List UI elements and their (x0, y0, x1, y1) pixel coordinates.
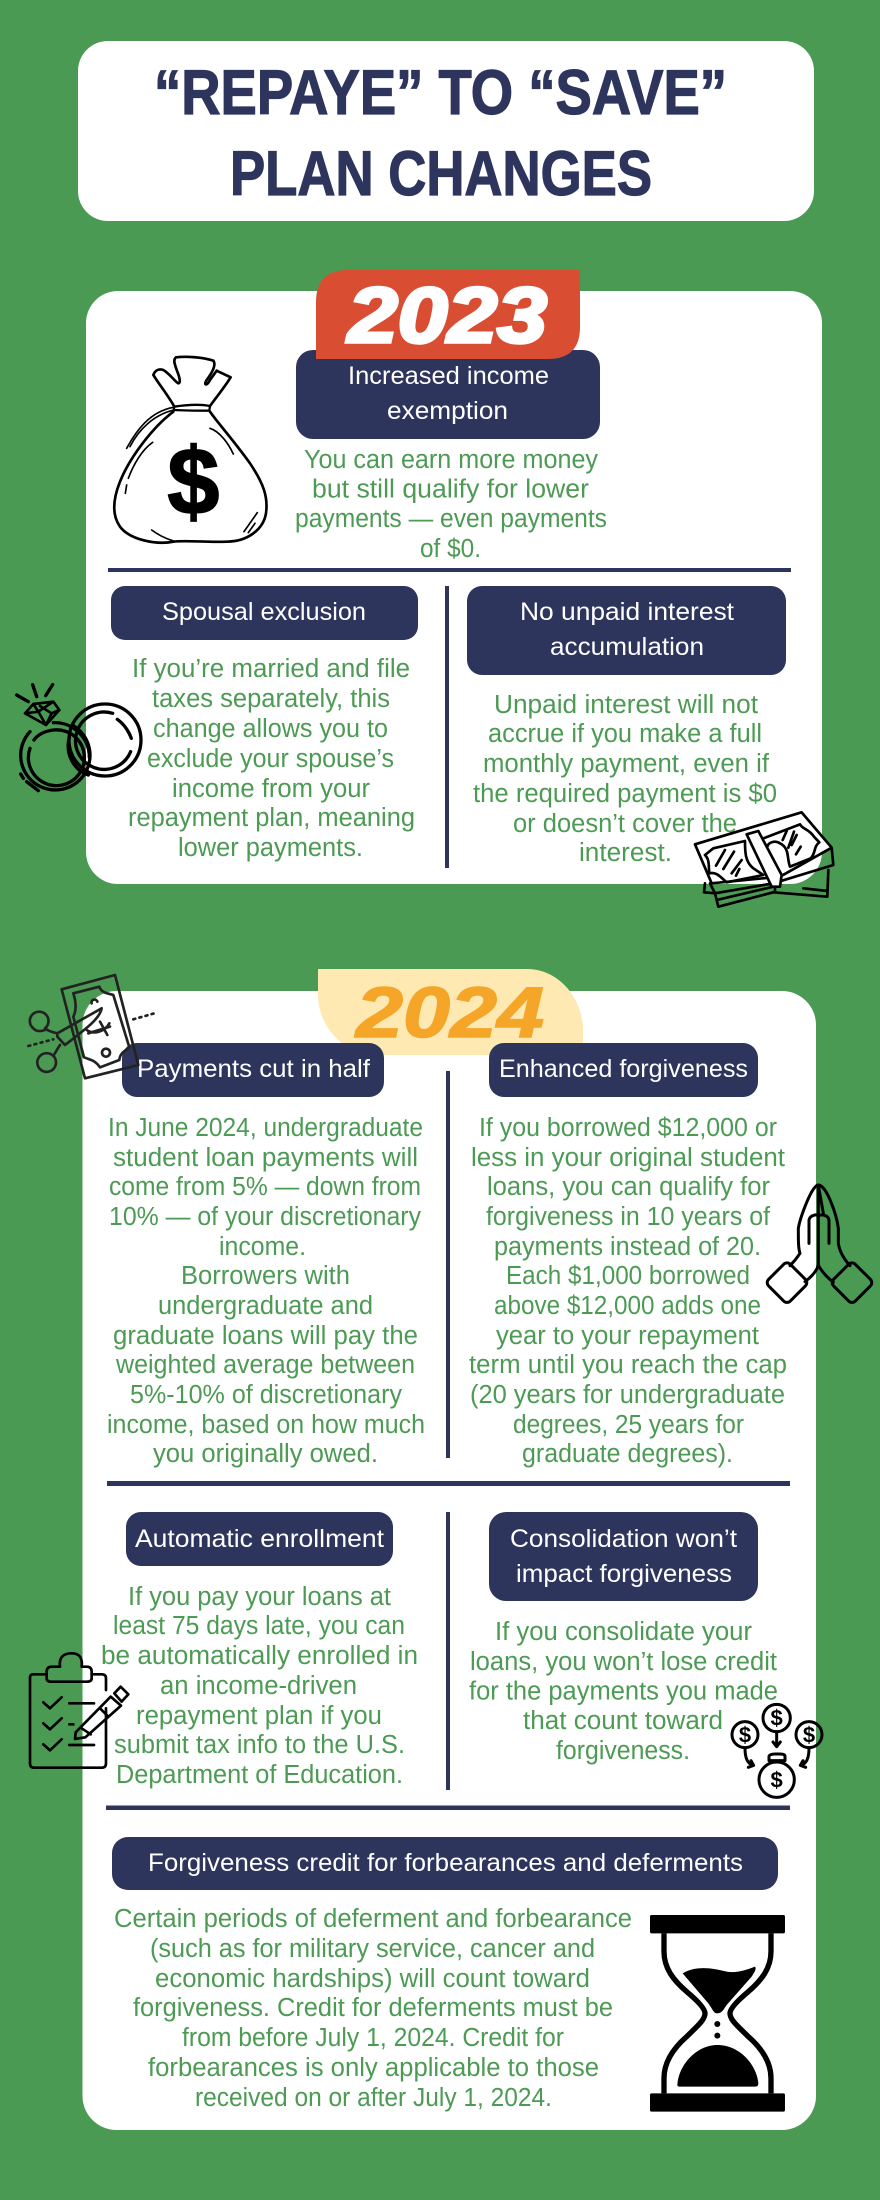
text: payments cut in half: graduate loans will pay the (113, 1322, 418, 1350)
text: no unpaid interest accumulation: Unpaid interest will not (494, 691, 758, 719)
heading pill: payments cut in half (122, 1043, 384, 1097)
icon: coins flowing into a money bag: $ (739, 1722, 751, 1747)
icon: money bag: $ (167, 429, 219, 535)
text: payments cut in half: undergraduate and (158, 1292, 373, 1320)
text: no unpaid interest accumulation: the required payment is $0 (473, 780, 777, 808)
text: payments cut in half: In June 2024, undergraduate (108, 1114, 423, 1142)
text: automatic enrollment: repayment plan if you (136, 1702, 382, 1730)
heading pill: increased income exemption: Increased income (348, 362, 549, 390)
text: automatic enrollment: an income-driven (160, 1672, 357, 1700)
icon: stack of cash (695, 812, 833, 907)
icon: wedding rings (17, 685, 141, 791)
text: consolidation won't impact forgiveness: that count toward (523, 1707, 723, 1735)
heading pill: spousal exclusion (111, 586, 418, 640)
year tab: 2023 (316, 270, 580, 359)
text: forgiveness credit: from before July 1, 2024. Credit for (182, 2024, 564, 2052)
text: spousal exclusion: taxes separately, this (152, 685, 390, 713)
text: payments cut in half: Borrowers with (181, 1262, 350, 1290)
heading pill: consolidation won't impact forgiveness: Consolidation won’t (510, 1525, 737, 1553)
year tab: 2024 (318, 969, 583, 1055)
icon: coins flowing into a money bag: $ (771, 1706, 783, 1731)
text: enhanced forgiveness: (20 years for undergraduate (470, 1381, 785, 1409)
text: no unpaid interest accumulation: monthly payment, even if (483, 750, 770, 778)
text: enhanced forgiveness: above $12,000 adds one (494, 1292, 761, 1320)
title: PLAN CHANGES (230, 139, 652, 209)
heading pill: consolidation won't impact forgiveness: impact forgiveness (516, 1560, 732, 1588)
heading pill: spousal exclusion: Spousal exclusion (162, 598, 366, 626)
text: no unpaid interest accumulation: accrue if you make a full (488, 720, 762, 748)
year tab: 2023: 2023 (346, 271, 547, 359)
heading pill: increased income exemption: exemption (387, 397, 508, 425)
text: spousal exclusion: repayment plan, meaning (128, 804, 415, 832)
text: enhanced forgiveness: payments instead of 20. (494, 1233, 761, 1261)
text: payments cut in half: 5%-10% of discretionary (130, 1381, 402, 1409)
text: spousal exclusion: lower payments. (178, 834, 363, 862)
text: payments cut in half: income. (219, 1233, 306, 1261)
text: automatic enrollment: If you pay your loans at (128, 1583, 391, 1611)
text: enhanced forgiveness: forgiveness in 10 years of (486, 1203, 771, 1231)
text: automatic enrollment (101, 1583, 418, 1789)
text: enhanced forgiveness: degrees, 25 years for (513, 1411, 744, 1439)
panel: 2024 changes (82, 969, 816, 2130)
heading pill: automatic enrollment: Automatic enrollment (135, 1525, 384, 1553)
text: payments cut in half: student loan payments will (113, 1144, 418, 1172)
year tab: 2024: 2024 (354, 974, 544, 1053)
heading pill: enhanced forgiveness: Enhanced forgiveness (499, 1055, 748, 1083)
heading pill: automatic enrollment (126, 1512, 393, 1566)
heading pill: consolidation won't impact forgiveness (489, 1512, 758, 1601)
text: no unpaid interest accumulation: interest. (579, 839, 672, 867)
text: enhanced forgiveness: year to your repayment (496, 1322, 759, 1350)
icon: coins flowing into a money bag: $ (771, 1768, 783, 1793)
heading pill: increased income exemption (296, 350, 600, 439)
heading pill: no unpaid interest accumulation: accumulation (550, 633, 704, 661)
text: automatic enrollment: Department of Education. (116, 1761, 403, 1789)
text: consolidation won't impact forgiveness: If you consolidate your (495, 1618, 753, 1646)
text: consolidation won't impact forgiveness: for the payments you made (469, 1678, 778, 1706)
text: spousal exclusion (128, 655, 415, 862)
text: payments cut in half: income, based on how much (107, 1411, 425, 1439)
text: no unpaid interest accumulation: or doesn’t cover the (513, 810, 737, 838)
heading pill: enhanced forgiveness (489, 1043, 758, 1097)
text: payments cut in half: you originally owed. (153, 1440, 378, 1468)
text: forgiveness credit: forbearances is only applicable to those (148, 2054, 599, 2082)
text: automatic enrollment: submit tax info to the U.S. (114, 1731, 405, 1759)
text: forgiveness credit: Certain periods of deferment and forbearance (114, 1905, 632, 1933)
title (78, 41, 814, 221)
text: consolidation won't impact forgiveness: forgiveness. (556, 1737, 690, 1765)
text: forgiveness credit: forgiveness. Credit for deferments must be (133, 1994, 613, 2022)
text: increased income exemption: You can earn more money (304, 446, 598, 474)
icon: coins flowing into a money bag: $ (803, 1722, 815, 1747)
text: forgiveness credit: received on or after July 1, 2024. (195, 2084, 552, 2112)
text: spousal exclusion: If you’re married and file (132, 655, 410, 683)
text: enhanced forgiveness: loans, you can qualify for (487, 1173, 770, 1201)
text: enhanced forgiveness: Each $1,000 borrowed (506, 1262, 750, 1290)
text: increased income exemption (295, 446, 607, 563)
heading pill: no unpaid interest accumulation: No unpaid interest (520, 598, 734, 626)
text: forgiveness credit: (such as for military service, cancer and (150, 1935, 595, 1963)
title: “REPAYE” TO “SAVE” (154, 58, 727, 128)
text: payments cut in half (107, 1114, 425, 1468)
text: enhanced forgiveness: less in your original student (471, 1144, 785, 1172)
text: forgiveness credit (114, 1905, 632, 2112)
heading pill: forgiveness credit (112, 1837, 778, 1890)
text: automatic enrollment: least 75 days late, you can (113, 1612, 405, 1640)
heading pill: no unpaid interest accumulation (467, 586, 786, 675)
icon: scissors cutting a bill (28, 975, 157, 1078)
text: increased income exemption: of $0. (420, 535, 481, 563)
panel: 2023 changes (86, 270, 822, 884)
text: increased income exemption: but still qualify for lower (312, 476, 590, 504)
icon: checklist clipboard (30, 1653, 128, 1768)
text: payments cut in half: 10% — of your discretionary (109, 1203, 421, 1231)
text: spousal exclusion: exclude your spouse’s (147, 745, 394, 773)
text: spousal exclusion: change allows you to (153, 715, 388, 743)
text: consolidation won't impact forgiveness (469, 1618, 778, 1765)
text: consolidation won't impact forgiveness: loans, you won’t lose credit (470, 1648, 777, 1676)
text: payments cut in half: weighted average between (115, 1351, 415, 1379)
text: enhanced forgiveness (469, 1114, 787, 1468)
text: automatic enrollment: be automatically enrolled in (101, 1642, 418, 1670)
icon: coins flowing into a money bag (732, 1704, 822, 1797)
text: no unpaid interest accumulation (473, 691, 777, 867)
text: forgiveness credit: economic hardships) will count toward (155, 1965, 590, 1993)
text: enhanced forgiveness: graduate degrees). (522, 1440, 733, 1468)
text: enhanced forgiveness: term until you reach the cap (469, 1351, 787, 1379)
icon: money bag (114, 357, 267, 543)
text: payments cut in half: come from 5% — down from (109, 1173, 421, 1201)
text: increased income exemption: payments — even payments (295, 505, 607, 533)
text: spousal exclusion: income from your (172, 775, 371, 803)
heading pill: forgiveness credit: Forgiveness credit for forbearances and deferments (148, 1849, 743, 1877)
heading pill: payments cut in half: Payments cut in half (137, 1055, 370, 1083)
text: enhanced forgiveness: If you borrowed $12,000 or (479, 1114, 777, 1142)
icon: hourglass (650, 1915, 785, 2112)
icon: praying hands (765, 1185, 874, 1304)
